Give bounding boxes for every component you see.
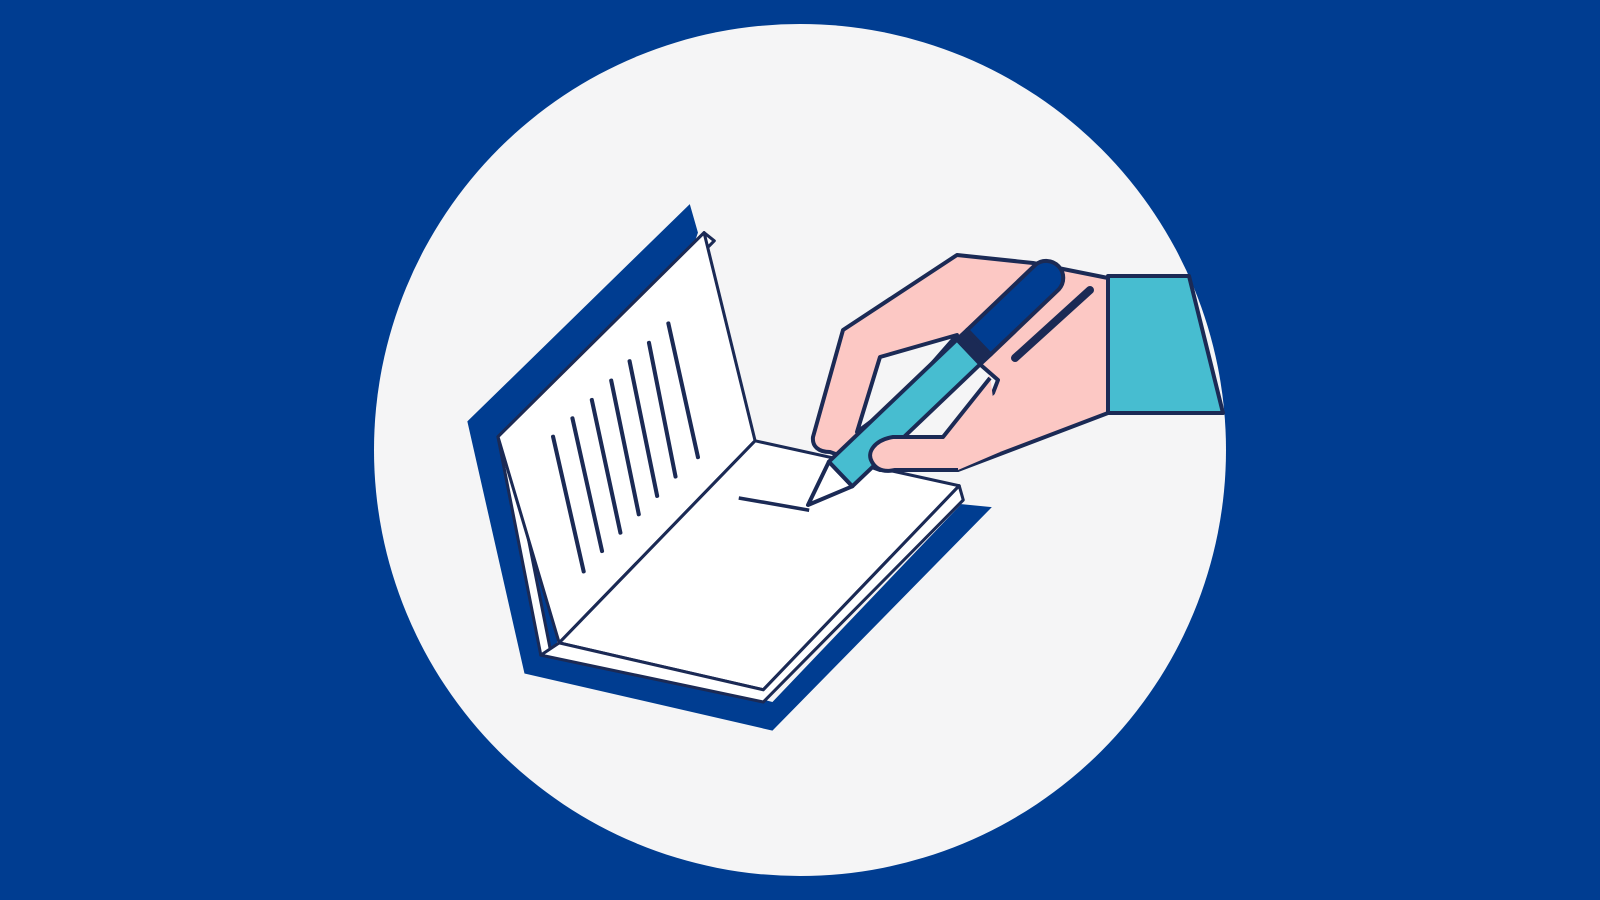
thumb outline xyxy=(870,378,990,471)
hand and pen xyxy=(808,255,1223,505)
pen tip xyxy=(808,462,852,505)
left page thickness xyxy=(498,233,714,655)
pen body xyxy=(829,340,980,486)
left page xyxy=(498,233,755,643)
text lines xyxy=(553,323,698,571)
book cover xyxy=(467,204,992,731)
hand xyxy=(813,255,1108,470)
pen cap xyxy=(967,261,1063,354)
right page xyxy=(559,441,959,690)
pen band xyxy=(957,330,991,364)
background circle xyxy=(374,24,1226,876)
sleeve xyxy=(1108,276,1223,413)
gap below pen xyxy=(900,360,998,440)
writing stroke xyxy=(739,498,809,510)
thumb xyxy=(870,375,1000,471)
pen clip xyxy=(1015,290,1090,358)
page stack bottom xyxy=(541,486,963,702)
book xyxy=(467,204,992,731)
gap between finger and pen xyxy=(857,335,957,432)
